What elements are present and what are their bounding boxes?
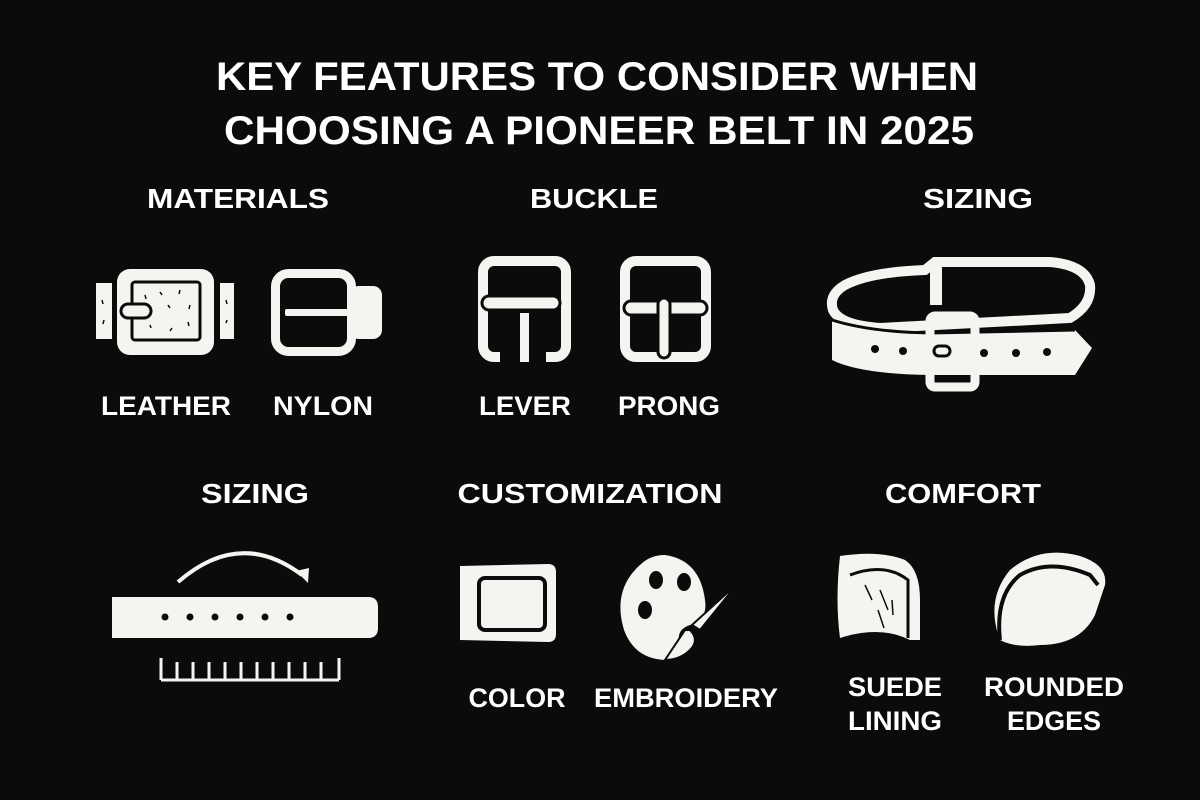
label: suede lining: LINING <box>848 706 942 736</box>
icon: lever buckle <box>482 261 566 364</box>
label: color: COLOR <box>468 683 566 713</box>
label: suede lining <box>848 672 942 736</box>
heading: customization: CUSTOMIZATION <box>458 478 722 509</box>
heading: comfort: COMFORT <box>885 478 1041 509</box>
icon: belt sizing <box>832 260 1092 387</box>
title: KEY FEATURES TO CONSIDER WHEN <box>216 55 978 99</box>
label: suede lining: SUEDE <box>848 672 942 702</box>
heading: buckle: BUCKLE <box>530 183 658 214</box>
title <box>216 55 978 153</box>
icon: suede lining <box>838 554 920 640</box>
title: CHOOSING A PIONEER BELT IN 2025 <box>224 109 974 153</box>
label: rounded edges: ROUNDED <box>984 672 1124 702</box>
icon: nylon <box>276 274 382 352</box>
icon: color <box>460 564 556 642</box>
label: rounded edges: EDGES <box>1007 706 1101 736</box>
label: lever: LEVER <box>479 391 571 421</box>
label: embroidery: EMBROIDERY <box>594 683 778 713</box>
icon: leather <box>96 269 234 355</box>
label: nylon: NYLON <box>273 391 373 421</box>
icon: embroidery palette <box>620 555 738 660</box>
icon: rounded edges <box>994 553 1105 646</box>
icon: belt with ruler and arrow <box>112 553 378 680</box>
label: prong: PRONG <box>618 391 720 421</box>
heading: materials: MATERIALS <box>147 183 329 214</box>
label: rounded edges <box>984 672 1124 736</box>
heading: sizing top: SIZING <box>923 183 1033 214</box>
icon: prong buckle <box>624 261 707 358</box>
label: leather: LEATHER <box>101 391 231 421</box>
heading: sizing bottom: SIZING <box>201 478 309 509</box>
